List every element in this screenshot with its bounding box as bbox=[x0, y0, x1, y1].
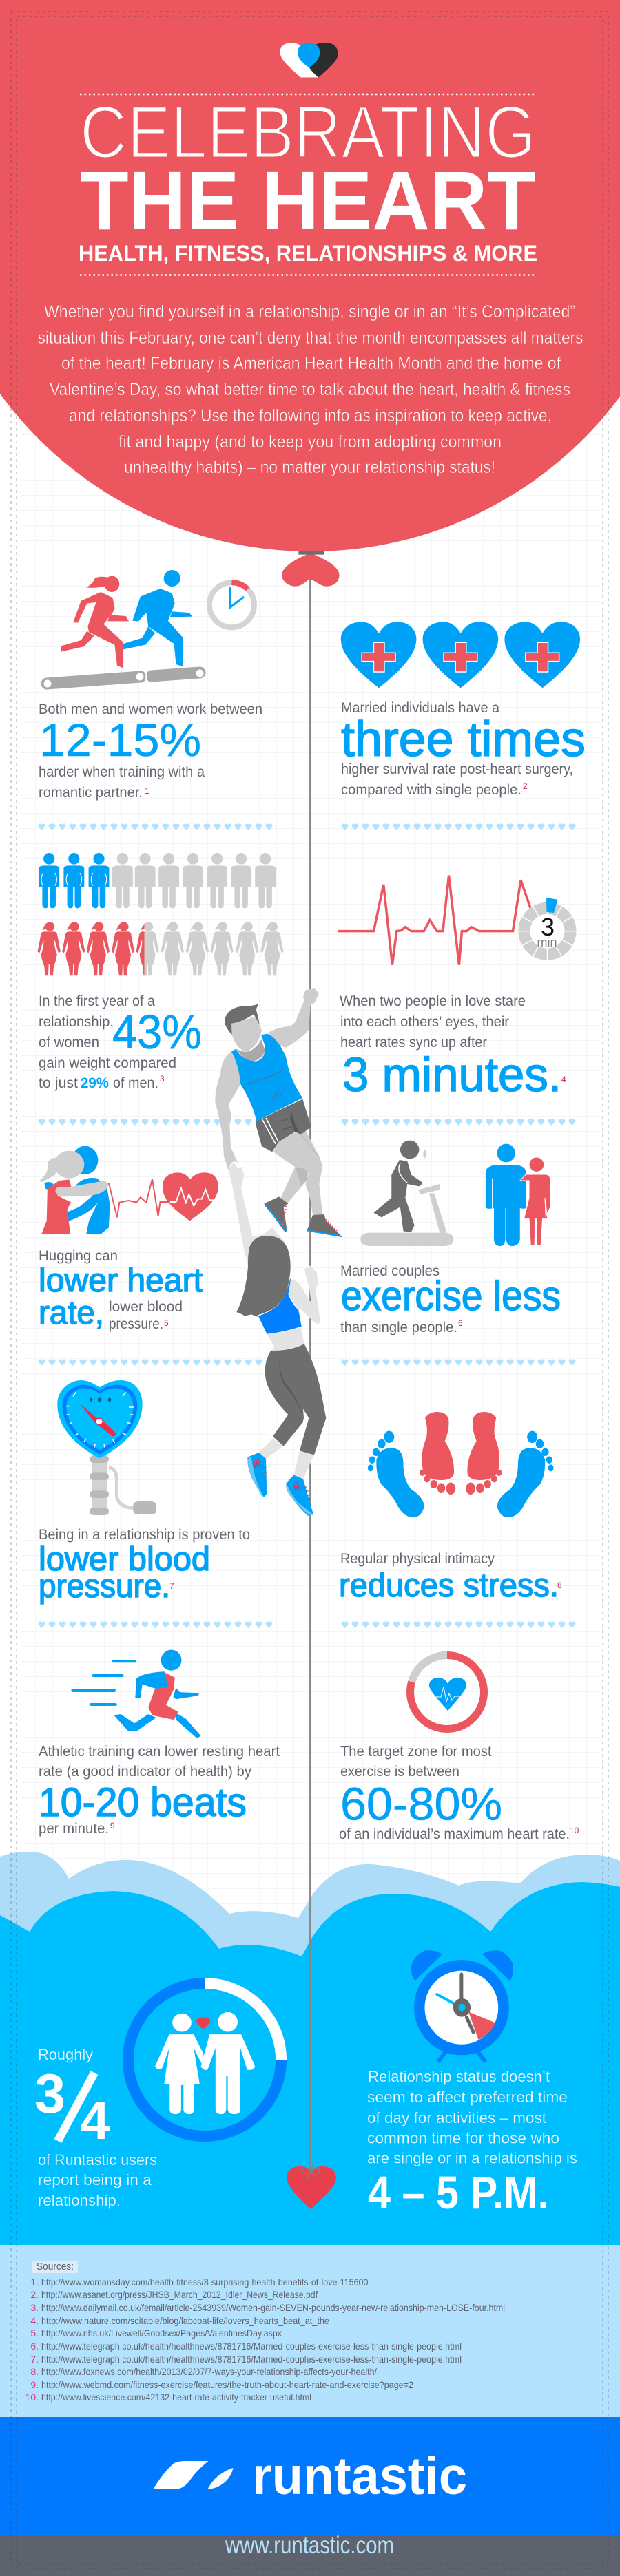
text: 60-80%: 10 bbox=[570, 1826, 579, 1835]
text: 10-20 beats: Athletic training can lower resting heart bbox=[39, 1744, 280, 1760]
text: 10-20 beats: rate (a good indicator of health) by bbox=[39, 1764, 251, 1780]
panel: three quarters of users bbox=[34, 1983, 281, 2209]
icon: heart gauge bbox=[57, 1380, 156, 1515]
icon: 3 minute timer bbox=[518, 898, 576, 960]
text: 12-15%: romantic partner. bbox=[39, 785, 143, 801]
source list: http://www.nhs.uk/Livewell/Goodsex/Pages/ValentinesDay.aspx bbox=[41, 2327, 282, 2339]
text: 10-20 beats: per minute. bbox=[39, 1821, 109, 1837]
text: lower blood pressure: pressure. bbox=[39, 1568, 170, 1605]
source list: 4. bbox=[30, 2315, 39, 2326]
panel: training with a partner bbox=[39, 570, 262, 801]
source list: 8. bbox=[30, 2366, 39, 2377]
source list bbox=[25, 2277, 505, 2403]
text: 43%: of men. bbox=[113, 1075, 158, 1091]
text: 43%: gain weight compared bbox=[39, 1055, 176, 1071]
text: lower blood pressure: Being in a relationship is proven to bbox=[39, 1527, 250, 1543]
panel: time of day bbox=[367, 1950, 577, 2219]
text: reduces stress bbox=[339, 1551, 562, 1604]
icon: man on treadmill bbox=[360, 1141, 453, 1246]
text: exercise less bbox=[340, 1263, 561, 1335]
icon: treadmill rollers bbox=[44, 669, 204, 687]
source list: http://www.webmd.com/fitness-exercise/features/the-truth-about-heart-rate-and-exercise?page=2 bbox=[41, 2379, 413, 2390]
icon: runtastic logo mark bbox=[153, 2461, 234, 2489]
text: 10-20 beats: 9 bbox=[110, 1821, 115, 1830]
text: 60-80%: of an individual’s maximum heart rate. bbox=[339, 1826, 570, 1842]
text: lower heart rate: lower blood bbox=[109, 1299, 183, 1315]
icon: row of men bbox=[39, 853, 276, 908]
intro paragraph: of the heart! February is American Heart Health Month and the home of bbox=[61, 354, 561, 373]
text: 60-80%: exercise is between bbox=[340, 1764, 459, 1780]
icon: alarm clock bbox=[411, 1950, 513, 2062]
chart: three-quarter ring bbox=[128, 1983, 281, 2136]
source list: 5. bbox=[30, 2327, 39, 2339]
text: 3 minutes: into each others’ eyes, their bbox=[340, 1014, 509, 1030]
text: three times: 2 bbox=[523, 781, 528, 791]
source list: http://www.foxnews.com/health/2013/02/07/7-ways-your-relationship-affects-your-health/ bbox=[41, 2366, 377, 2377]
text: 3 minutes: 4 bbox=[561, 1075, 566, 1084]
text: three times: Married individuals have a bbox=[341, 700, 499, 716]
subtitle: HEALTH, FITNESS, RELATIONSHIPS & MORE bbox=[79, 241, 537, 266]
title line one: CELEBRATING bbox=[80, 90, 536, 173]
source list: http://www.nature.com/scitable/blog/labcoat-life/lovers_hearts_beat_at_the bbox=[41, 2315, 329, 2326]
text: 3 minutes: When two people in love stare bbox=[340, 993, 526, 1009]
text: roughly three quarters: relationship. bbox=[38, 2192, 121, 2209]
text: 43%: In the first year of a bbox=[39, 993, 155, 1009]
intro paragraph: unhealthy habits) – no matter your relationship status! bbox=[124, 458, 495, 477]
icon: three overlapping hearts bbox=[280, 43, 338, 78]
source list: http://www.livescience.com/42132-heart-rate-activity-tracker-useful.html bbox=[41, 2392, 311, 2403]
text: 43%: 3 bbox=[160, 1074, 165, 1084]
clouds background bbox=[0, 1852, 620, 2246]
icon: sprinting runner bbox=[71, 1650, 201, 1738]
text: 12-15%: 12-15% bbox=[39, 715, 201, 766]
source list: 2. bbox=[30, 2289, 39, 2300]
panel: exercise less bbox=[340, 1141, 561, 1335]
icon: climbing man bbox=[215, 988, 342, 1237]
text: relationship status bbox=[367, 2068, 577, 2219]
text: roughly three quarters bbox=[34, 2046, 157, 2209]
text: 3 minutes bbox=[340, 993, 566, 1101]
panel: blood pressure bbox=[39, 1380, 250, 1605]
source list: 9. bbox=[30, 2379, 39, 2390]
intro paragraph: Whether you find yourself in a relationship, single or in an “It’s Complicated” bbox=[44, 302, 575, 321]
icon: four footprints bbox=[368, 1412, 554, 1517]
text: three times: compared with single people. bbox=[341, 782, 521, 798]
text: exercise less: 6 bbox=[458, 1318, 463, 1328]
text: exercise less: exercise less bbox=[341, 1273, 561, 1319]
source list: 3. bbox=[30, 2302, 39, 2313]
panel: weight gain bbox=[38, 853, 284, 1091]
text: 60-80% bbox=[339, 1744, 579, 1842]
icon: heart at end of string bbox=[287, 2164, 336, 2210]
balloon knot bbox=[282, 551, 339, 587]
text: 43%: 29% bbox=[81, 1075, 109, 1091]
source list: http://www.dailymail.co.uk/femail/article-2543939/Women-gain-SEVEN-pounds-year-new-relationship-men-LOSE-four.html bbox=[41, 2302, 505, 2313]
panel: hugging bbox=[39, 1146, 218, 1332]
icon: climbing woman bbox=[229, 1162, 326, 1516]
text: three times bbox=[341, 700, 586, 798]
text: relationship status: are single or in a relationship is bbox=[367, 2150, 577, 2167]
text: lower heart rate: Hugging can bbox=[39, 1248, 118, 1264]
text: relationship status: seem to affect preferred time bbox=[367, 2089, 568, 2106]
text: roughly three quarters: report being in a bbox=[38, 2171, 152, 2188]
panel: sources bbox=[0, 2245, 620, 2417]
heart divider rows bbox=[37, 822, 577, 1629]
panel: athletic training bbox=[39, 1650, 280, 1837]
text: 60-80%: 60-80% bbox=[340, 1779, 502, 1830]
text: relationship status: Relationship status doesn’t bbox=[368, 2068, 550, 2085]
text: 12-15%: harder when training with a bbox=[39, 764, 205, 780]
icon: married couple bbox=[486, 1144, 550, 1246]
text: 3 minutes: 3 minutes. bbox=[342, 1048, 561, 1101]
panel: footer bbox=[0, 2532, 620, 2576]
text: relationship status: 4 – 5 P.M. bbox=[368, 2167, 549, 2219]
text: reduces stress: Regular physical intimacy bbox=[340, 1551, 495, 1567]
text: 12-15%: 1 bbox=[145, 786, 149, 796]
website url: www.runtastic.com bbox=[225, 2532, 394, 2559]
text: relationship status: of day for activities – most bbox=[367, 2109, 546, 2126]
header panel bbox=[0, 0, 620, 551]
intro paragraph: situation this February, one can’t deny that the month encompasses all matters bbox=[37, 328, 583, 348]
source list: http://www.telegraph.co.uk/health/healthnews/8781716/Married-couples-exercise-less-than-single-people.html bbox=[41, 2341, 462, 2352]
icon: three hearts with crosses bbox=[341, 622, 580, 688]
panel: intimacy bbox=[339, 1412, 562, 1604]
panel: heart rates sync bbox=[338, 876, 576, 1101]
source list: http://www.asanet.org/press/JHSB_March_2012_Idler_News_Release.pdf bbox=[41, 2289, 318, 2300]
text: 10-20 beats bbox=[39, 1744, 280, 1837]
sources label: Sources: bbox=[37, 2261, 74, 2272]
icon: stopwatch ring bbox=[209, 582, 254, 627]
source list: http://www.telegraph.co.uk/health/healthnews/8781716/Married-couples-exercise-less-than-single-people.html bbox=[41, 2354, 462, 2365]
chart: ECG line bbox=[338, 876, 530, 965]
text: lower heart rate bbox=[39, 1248, 203, 1332]
text: 43%: 43% bbox=[112, 1005, 202, 1059]
text: lower blood pressure bbox=[39, 1527, 250, 1605]
text: 12-15%: Both men and women work between bbox=[39, 701, 262, 717]
text: roughly three quarters: Roughly bbox=[38, 2046, 93, 2063]
text: reduces stress: reduces stress. bbox=[339, 1567, 559, 1604]
balloon string bbox=[309, 579, 311, 2170]
source list: http://www.womansday.com/health-fitness/8-surprising-health-benefits-of-love-115600 bbox=[41, 2277, 369, 2288]
text: lower heart rate: rate, bbox=[39, 1295, 104, 1331]
icon: row of women bbox=[38, 922, 284, 975]
panel: target zone bbox=[339, 1655, 579, 1842]
text: lower blood pressure: lower blood bbox=[39, 1541, 210, 1578]
panel: three times survival bbox=[341, 622, 586, 798]
text: 43%: relationship, bbox=[39, 1014, 114, 1030]
intro paragraph: fit and happy (and to keep you from adopting common bbox=[118, 432, 502, 452]
text: roughly three quarters: 4 bbox=[80, 2090, 110, 2151]
intro paragraph: and relationships? Use the following info as inspiration to keep active, bbox=[69, 406, 552, 425]
title line two: THE HEART bbox=[80, 154, 536, 247]
text: 60-80%: The target zone for most bbox=[340, 1744, 492, 1760]
source list: 1. bbox=[30, 2277, 39, 2288]
text: 43%: of women bbox=[39, 1035, 99, 1051]
text: 3 minutes: heart rates sync up after bbox=[340, 1035, 487, 1051]
source list: 6. bbox=[30, 2341, 39, 2352]
icon: heart-rate donut bbox=[411, 1655, 484, 1729]
text: relationship status: common time for those who bbox=[367, 2130, 559, 2146]
source list: 7. bbox=[30, 2354, 39, 2365]
icon: 3 minute timer: 3 bbox=[541, 913, 555, 941]
icon: hugging couple with heart bbox=[39, 1146, 218, 1234]
text: three times: three times bbox=[341, 712, 586, 767]
intro paragraph bbox=[37, 302, 583, 477]
icon: 3 minute timer: min bbox=[537, 936, 557, 949]
text: lower heart rate: pressure. bbox=[109, 1316, 163, 1332]
text: 43% bbox=[39, 993, 202, 1091]
text: three times: higher survival rate post-heart surgery, bbox=[341, 761, 573, 777]
icon: two runners bbox=[61, 570, 193, 668]
text: lower heart rate: lower heart bbox=[39, 1263, 203, 1299]
text: 43%: to just bbox=[39, 1075, 78, 1091]
text: lower heart rate: 5 bbox=[164, 1318, 169, 1328]
text: exercise less: than single people. bbox=[340, 1320, 457, 1335]
text: exercise less: Married couples bbox=[340, 1263, 440, 1279]
text: lower blood pressure: 7 bbox=[169, 1581, 174, 1591]
icon: couple holding hands bbox=[155, 2012, 255, 2114]
panel: logo band bbox=[0, 2417, 620, 2535]
text: 12-15% bbox=[39, 701, 262, 801]
text: roughly three quarters: of Runtastic users bbox=[38, 2151, 157, 2168]
logo wordmark: runtastic bbox=[252, 2447, 467, 2506]
text: 10-20 beats: 10-20 beats bbox=[39, 1780, 247, 1825]
text: reduces stress: 8 bbox=[557, 1581, 562, 1590]
intro paragraph: Valentine’s Day, so what better time to talk about the heart, health & fitness bbox=[50, 380, 570, 399]
text: roughly three quarters: 3 bbox=[34, 2063, 65, 2125]
source list: 10. bbox=[25, 2392, 39, 2403]
